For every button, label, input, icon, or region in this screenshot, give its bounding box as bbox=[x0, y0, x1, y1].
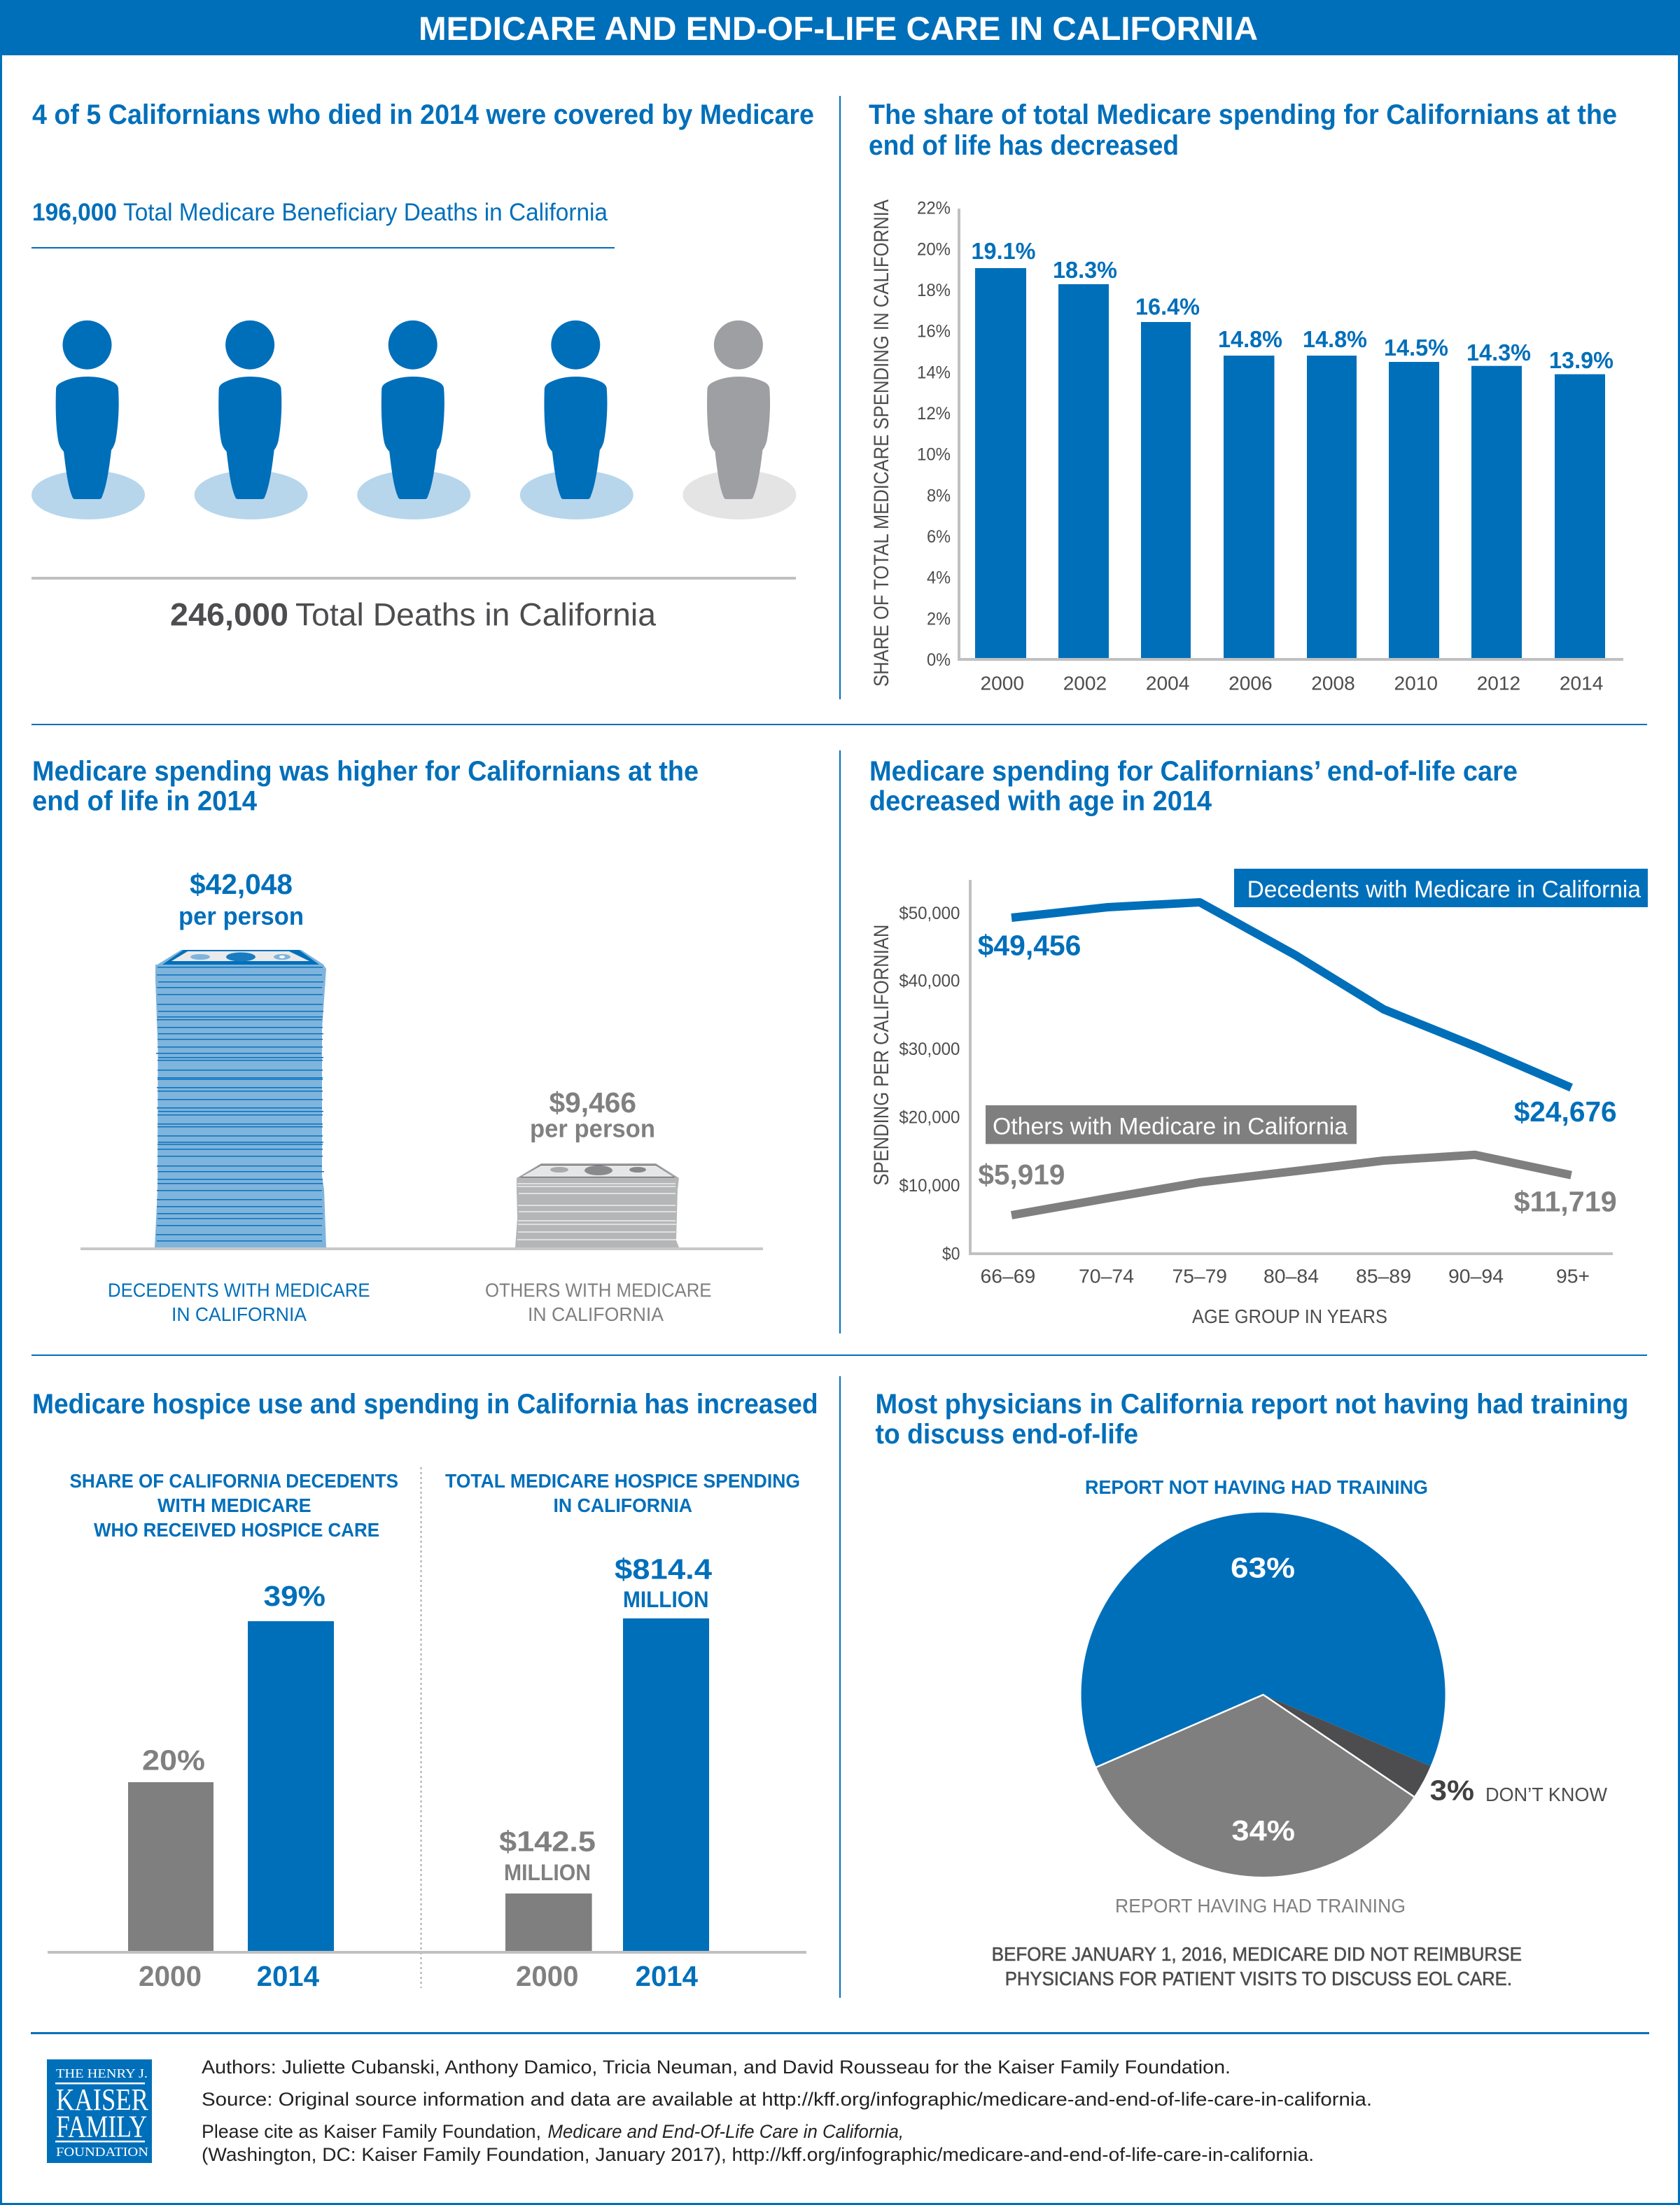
y-axis tick labels: $0 bbox=[942, 1245, 960, 1264]
subheading: share of decedents in hospice bbox=[70, 1470, 398, 1541]
subheading: share of decedents in hospice: WITH MEDICARE bbox=[158, 1494, 312, 1516]
label: others with Medicare bbox=[485, 1280, 711, 1325]
heading: spending decreased with age bbox=[869, 756, 1518, 817]
x-axis age labels: 95+ bbox=[1556, 1265, 1590, 1287]
logo: Kaiser Family Foundation: KAISER bbox=[56, 2082, 149, 2117]
y-axis tick labels: $20,000 bbox=[899, 1108, 960, 1128]
logo: Kaiser Family Foundation bbox=[47, 2059, 152, 2163]
label: decedents with Medicare: DECEDENTS WITH MEDICARE bbox=[108, 1280, 370, 1301]
x-axis year labels bbox=[980, 672, 1603, 694]
x-axis age labels: 85–89 bbox=[1356, 1265, 1411, 1287]
y-axis tick labels: 18% bbox=[917, 281, 951, 300]
bar value labels: 14.5% bbox=[1384, 335, 1448, 360]
line: others bbox=[1011, 1155, 1572, 1215]
bar chart: hospice spending: MILLION bbox=[623, 1587, 708, 1612]
bar chart: share receiving hospice: 39% bbox=[263, 1580, 326, 1612]
y-axis tick labels: $50,000 bbox=[899, 904, 960, 923]
icon: short gray stack of money bbox=[515, 1163, 679, 1247]
y-axis tick labels: 16% bbox=[917, 322, 951, 342]
label: 3% don't know: 3% bbox=[1430, 1774, 1474, 1807]
label: others with Medicare: IN CALIFORNIA bbox=[528, 1303, 664, 1325]
text: source: Source: Original source information and data are available at http://kff.org/infographic/medicare-and-end-of-life-care-in-california. bbox=[202, 2089, 1372, 2110]
footer bbox=[47, 2057, 1372, 2165]
pie chart: training: 63% bbox=[1231, 1552, 1295, 1584]
y-axis title: SPENDING PER CALIFORNIAN bbox=[870, 925, 893, 1186]
panel: share of Medicare spending at end of life bbox=[869, 99, 1623, 694]
heading: Medicare spending was higher: end of life in 2014 bbox=[32, 786, 258, 817]
x-axis year labels: 2012 bbox=[1477, 672, 1520, 694]
callout: $42,048 per person: $42,048 bbox=[190, 868, 293, 900]
y-axis title: SHARE OF TOTAL MEDICARE SPENDING IN CALIFORNIA bbox=[870, 200, 893, 687]
label: decedents with Medicare bbox=[108, 1280, 370, 1325]
x-axis year labels: 2002 bbox=[1063, 672, 1107, 694]
note: reimbursement: BEFORE JANUARY 1, 2016, MEDICARE DID NOT REIMBURSE bbox=[992, 1943, 1522, 1965]
bar value labels: 19.1% bbox=[972, 238, 1036, 264]
data labels bbox=[978, 929, 1617, 1217]
subheading: total hospice spending bbox=[445, 1470, 800, 1516]
bar value labels: 18.3% bbox=[1053, 257, 1117, 283]
line chart: spending per Californian by age group bbox=[870, 869, 1648, 1327]
label: report not having had training: REPORT NOT HAVING HAD TRAINING bbox=[1085, 1476, 1428, 1498]
heading: share of total Medicare spending bbox=[869, 99, 1617, 161]
bar chart: share receiving hospice: 2014 bbox=[257, 1960, 319, 1992]
label: 3% don't know: DON’T KNOW bbox=[1485, 1784, 1608, 1805]
y-axis tick labels: 10% bbox=[917, 445, 951, 465]
data labels: $5,919 bbox=[978, 1158, 1065, 1191]
text: citation: Please cite as Kaiser Family Foundation, bbox=[202, 2121, 541, 2142]
heading: share of total Medicare spending: The share of total Medicare spending for Californians at the bbox=[869, 99, 1617, 130]
x-axis age labels bbox=[980, 1265, 1590, 1287]
legend: others bbox=[986, 1105, 1357, 1144]
y-axis tick labels: 2% bbox=[927, 609, 951, 629]
text: citation bbox=[202, 2121, 1314, 2165]
x-axis age labels: 90–94 bbox=[1448, 1265, 1504, 1287]
y-axis tick labels: 14% bbox=[917, 363, 951, 382]
bar value labels: 14.8% bbox=[1303, 326, 1367, 352]
y-axis tick labels: 20% bbox=[917, 239, 951, 259]
icon: tall blue stack of money bbox=[155, 950, 326, 1247]
text: citation: (Washington, DC: Kaiser Family Foundation, January 2017), http://kff.org/infographic/medicare-and-end-of-life-care-in-california. bbox=[202, 2144, 1314, 2165]
panel: spending by age bbox=[869, 756, 1648, 1327]
bar value labels: 13.9% bbox=[1549, 347, 1614, 373]
bar chart: hospice spending: MILLION bbox=[504, 1860, 591, 1885]
y-axis tick labels: $10,000 bbox=[899, 1176, 960, 1196]
icon: person 4 of 5, Medicare bbox=[520, 321, 634, 519]
heading: spending decreased with age: Medicare spending for Californians’ end-of-life care bbox=[869, 756, 1518, 787]
x-axis year labels: 2014 bbox=[1560, 672, 1603, 694]
note: reimbursement: PHYSICIANS FOR PATIENT VISITS TO DISCUSS EOL CARE. bbox=[1005, 1968, 1512, 1989]
title banner: MEDICARE AND END-OF-LIFE CARE IN CALIFORNIA bbox=[419, 10, 1258, 47]
x-axis age labels: 75–79 bbox=[1172, 1265, 1227, 1287]
data labels: $49,456 bbox=[978, 929, 1081, 961]
label: decedents with Medicare: IN CALIFORNIA bbox=[172, 1303, 307, 1325]
heading: most physicians report no training: to discuss end-of-life bbox=[875, 1419, 1138, 1450]
note: reimbursement bbox=[992, 1943, 1522, 1989]
y-axis tick labels: 4% bbox=[927, 568, 951, 588]
bar value labels: 16.4% bbox=[1135, 294, 1200, 319]
label: report having had training: REPORT HAVING HAD TRAINING bbox=[1115, 1895, 1406, 1917]
heading: most physicians report no training bbox=[875, 1389, 1628, 1450]
subheading: share of decedents in hospice: SHARE OF CALIFORNIA DECEDENTS bbox=[70, 1470, 398, 1492]
data labels: $11,719 bbox=[1514, 1185, 1617, 1217]
bar value labels: 14.8% bbox=[1218, 326, 1282, 352]
subheading: share of decedents in hospice: WHO RECEIVED HOSPICE CARE bbox=[94, 1519, 379, 1541]
heading: hospice has increased: Medicare hospice use and spending in California has increased bbox=[32, 1389, 818, 1420]
icon: person 1 of 5, Medicare bbox=[31, 321, 145, 519]
bar chart: share receiving hospice: 20% bbox=[142, 1744, 205, 1777]
x-axis year labels: 2010 bbox=[1394, 672, 1438, 694]
text: citation: Medicare and End-Of-Life Care in California, bbox=[547, 2121, 904, 2142]
panel: Medicare share of deaths bbox=[31, 99, 814, 633]
bars bbox=[975, 268, 1605, 658]
heading: most physicians report no training: Most physicians in California report not having had training bbox=[875, 1389, 1628, 1420]
heading: Medicare spending was higher: Medicare spending was higher for Californians at the bbox=[32, 756, 699, 787]
x-axis age labels: 70–74 bbox=[1079, 1265, 1134, 1287]
heading: Medicare spending was higher bbox=[32, 756, 699, 817]
heading: share of total Medicare spending: end of life has decreased bbox=[869, 130, 1179, 161]
legend: others: Others with Medicare in California bbox=[993, 1114, 1348, 1140]
icon: person 3 of 5, Medicare bbox=[357, 321, 470, 519]
logo: Kaiser Family Foundation: FOUNDATION bbox=[56, 2145, 148, 2159]
y-axis tick labels: 12% bbox=[917, 404, 951, 424]
icon: person 2 of 5, Medicare bbox=[195, 321, 308, 519]
heading: 4 of 5 Californians: 4 of 5 Californians who died in 2014 were covered by Medicare bbox=[32, 99, 814, 130]
subheading: total hospice spending: TOTAL MEDICARE HOSPICE SPENDING bbox=[445, 1470, 800, 1492]
bar value labels: 14.3% bbox=[1466, 340, 1531, 365]
text: 246,000 total deaths: Total Deaths in California bbox=[295, 596, 657, 633]
icon: person 5 of 5, not Medicare bbox=[682, 321, 796, 519]
pie chart: training bbox=[1082, 1513, 1446, 1877]
x-axis title: AGE GROUP IN YEARS bbox=[1192, 1306, 1387, 1327]
y-axis tick labels: 6% bbox=[927, 527, 951, 547]
panel: physician training bbox=[875, 1389, 1628, 1989]
callout: $42,048 per person: per person bbox=[178, 902, 304, 930]
panel: spending higher at end of life bbox=[32, 756, 763, 1325]
text: authors: Authors: Juliette Cubanski, Anthony Damico, Tricia Neuman, and David Rousseau for the Kaiser Family Foundation. bbox=[202, 2057, 1231, 2078]
bar chart: hospice spending: $142.5 bbox=[499, 1826, 596, 1858]
panel: hospice use and spending bbox=[32, 1389, 818, 1992]
bar chart: share receiving hospice bbox=[128, 1580, 334, 1992]
y-axis tick labels bbox=[917, 199, 951, 670]
bar chart: share receiving hospice: 2000 bbox=[139, 1960, 202, 1992]
title banner bbox=[0, 0, 1680, 55]
heading: spending decreased with age: decreased with age in 2014 bbox=[869, 786, 1212, 817]
y-axis tick labels bbox=[899, 904, 960, 1264]
x-axis age labels: 80–84 bbox=[1264, 1265, 1319, 1287]
bar chart: hospice spending bbox=[499, 1553, 712, 1992]
x-axis year labels: 2000 bbox=[980, 672, 1024, 694]
x-axis year labels: 2006 bbox=[1228, 672, 1273, 694]
pie chart: training: 34% bbox=[1231, 1814, 1295, 1847]
label: 3% don't know bbox=[1430, 1774, 1608, 1807]
x-axis year labels: 2004 bbox=[1146, 672, 1189, 694]
callout: $9,466 per person: per person bbox=[530, 1114, 655, 1142]
bar chart: hospice spending: $814.4 bbox=[615, 1553, 712, 1585]
bar chart: hospice spending: 2014 bbox=[636, 1960, 698, 1992]
data labels: $24,676 bbox=[1514, 1096, 1617, 1128]
bar chart: hospice spending: 2000 bbox=[516, 1960, 578, 1992]
logo: Kaiser Family Foundation: FAMILY bbox=[56, 2110, 147, 2144]
y-axis tick labels: 22% bbox=[917, 199, 951, 218]
y-axis tick labels: 8% bbox=[927, 486, 951, 505]
x-axis year labels: 2008 bbox=[1311, 672, 1355, 694]
bar value labels bbox=[972, 238, 1614, 373]
y-axis tick labels: $40,000 bbox=[899, 971, 960, 990]
y-axis tick labels: 0% bbox=[927, 650, 951, 670]
callout: $42,048 per person bbox=[178, 868, 304, 930]
y-axis tick labels: $30,000 bbox=[899, 1040, 960, 1059]
legend: decedents: Decedents with Medicare in California bbox=[1247, 876, 1641, 903]
bar chart: share of spending 2000 to 2014 bbox=[870, 199, 1623, 694]
x-axis age labels: 66–69 bbox=[980, 1265, 1035, 1287]
text: 196,000 Medicare beneficiary deaths: Total Medicare Beneficiary Deaths in California bbox=[123, 199, 608, 226]
callout: $9,466 per person: $9,466 bbox=[549, 1086, 636, 1119]
subheading: total hospice spending: IN CALIFORNIA bbox=[553, 1494, 692, 1516]
callout: $9,466 per person bbox=[530, 1086, 655, 1142]
text: 246,000 total deaths: 246,000 bbox=[170, 596, 288, 633]
legend: decedents bbox=[1234, 869, 1648, 907]
label: others with Medicare: OTHERS WITH MEDICARE bbox=[485, 1280, 711, 1301]
logo: Kaiser Family Foundation: THE HENRY J. bbox=[56, 2066, 148, 2080]
line: decedents bbox=[1011, 902, 1572, 1088]
text: 196,000 Medicare beneficiary deaths: 196,000 bbox=[32, 199, 117, 226]
